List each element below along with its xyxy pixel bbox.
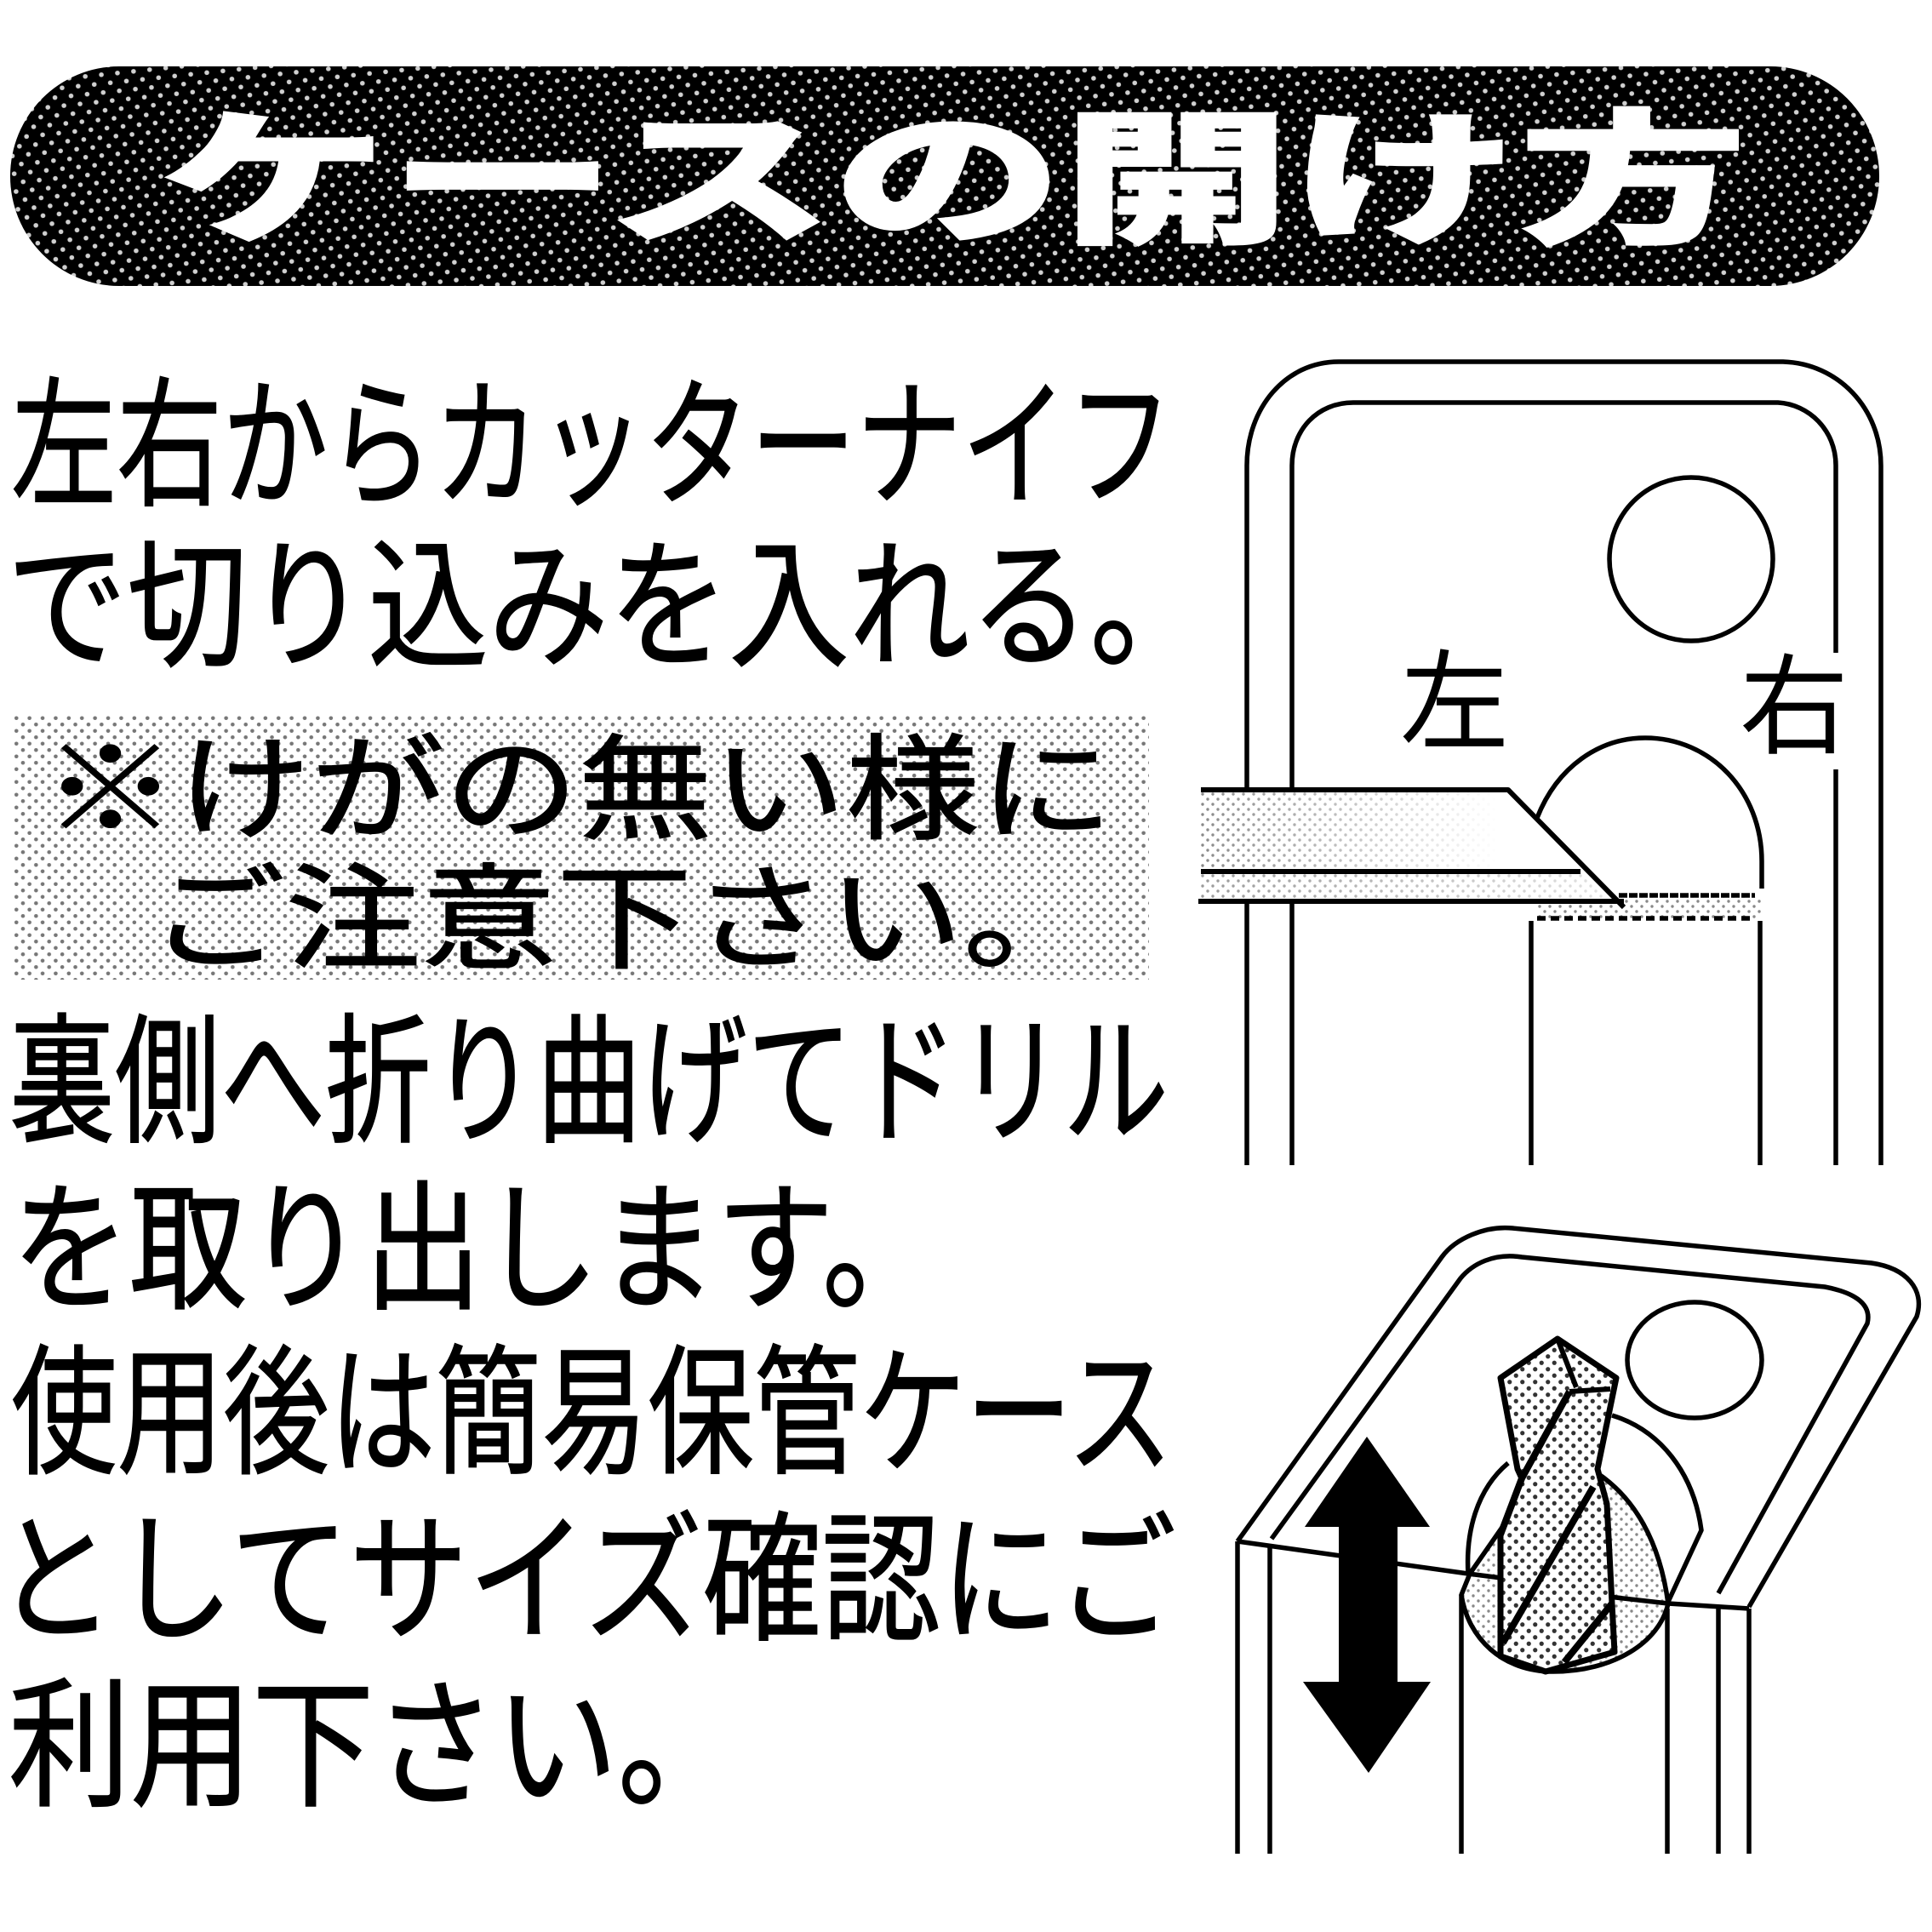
label: left: 左 — [1400, 643, 1509, 764]
title banner — [10, 66, 1879, 286]
label: right: 右 — [1740, 647, 1849, 769]
flap opening — [1612, 1415, 1701, 1602]
callout: safety caution — [14, 715, 1149, 984]
instruction text: step one — [7, 368, 1210, 685]
drill slot — [1531, 738, 1762, 1165]
instruction text: step two — [9, 1004, 1169, 1328]
hole circle — [1609, 477, 1773, 641]
instruction text: reuse as storage case — [0, 1335, 1176, 1825]
drill slot bulge — [1461, 1473, 1668, 1672]
title text: ケースの開け方 — [160, 101, 1747, 263]
instruction text: reuse as storage case: 利用下さい。 — [9, 1668, 740, 1825]
instruction text: step one: で切り込みを入れる。 — [7, 529, 1210, 685]
instruction text: reuse as storage case: としてサイズ確認にご — [0, 1502, 1176, 1659]
instruction text: reuse as storage case: 使用後は簡易保管ケース — [11, 1335, 1173, 1492]
instruction text: step two: を取り出します。 — [12, 1171, 940, 1328]
callout: safety caution: ※けがの無い様に — [43, 726, 1113, 855]
hole circle — [1627, 1302, 1762, 1418]
diagram: cutting the case with a knife — [1198, 362, 1881, 1165]
callout: safety caution: ご注意下さい。 — [150, 855, 1099, 984]
case outline — [1247, 362, 1881, 1165]
folded case outline — [1238, 1228, 1918, 1854]
diagram: folding back to remove the drill — [1238, 1228, 1918, 1854]
double-headed arrow — [1303, 1437, 1431, 1773]
instruction text: step one: 左右からカッターナイフ — [11, 368, 1173, 524]
drill bit — [1500, 1339, 1616, 1672]
cutter knife blade — [1198, 790, 1624, 907]
instruction text: step two: 裏側へ折り曲げてドリル — [9, 1004, 1169, 1161]
